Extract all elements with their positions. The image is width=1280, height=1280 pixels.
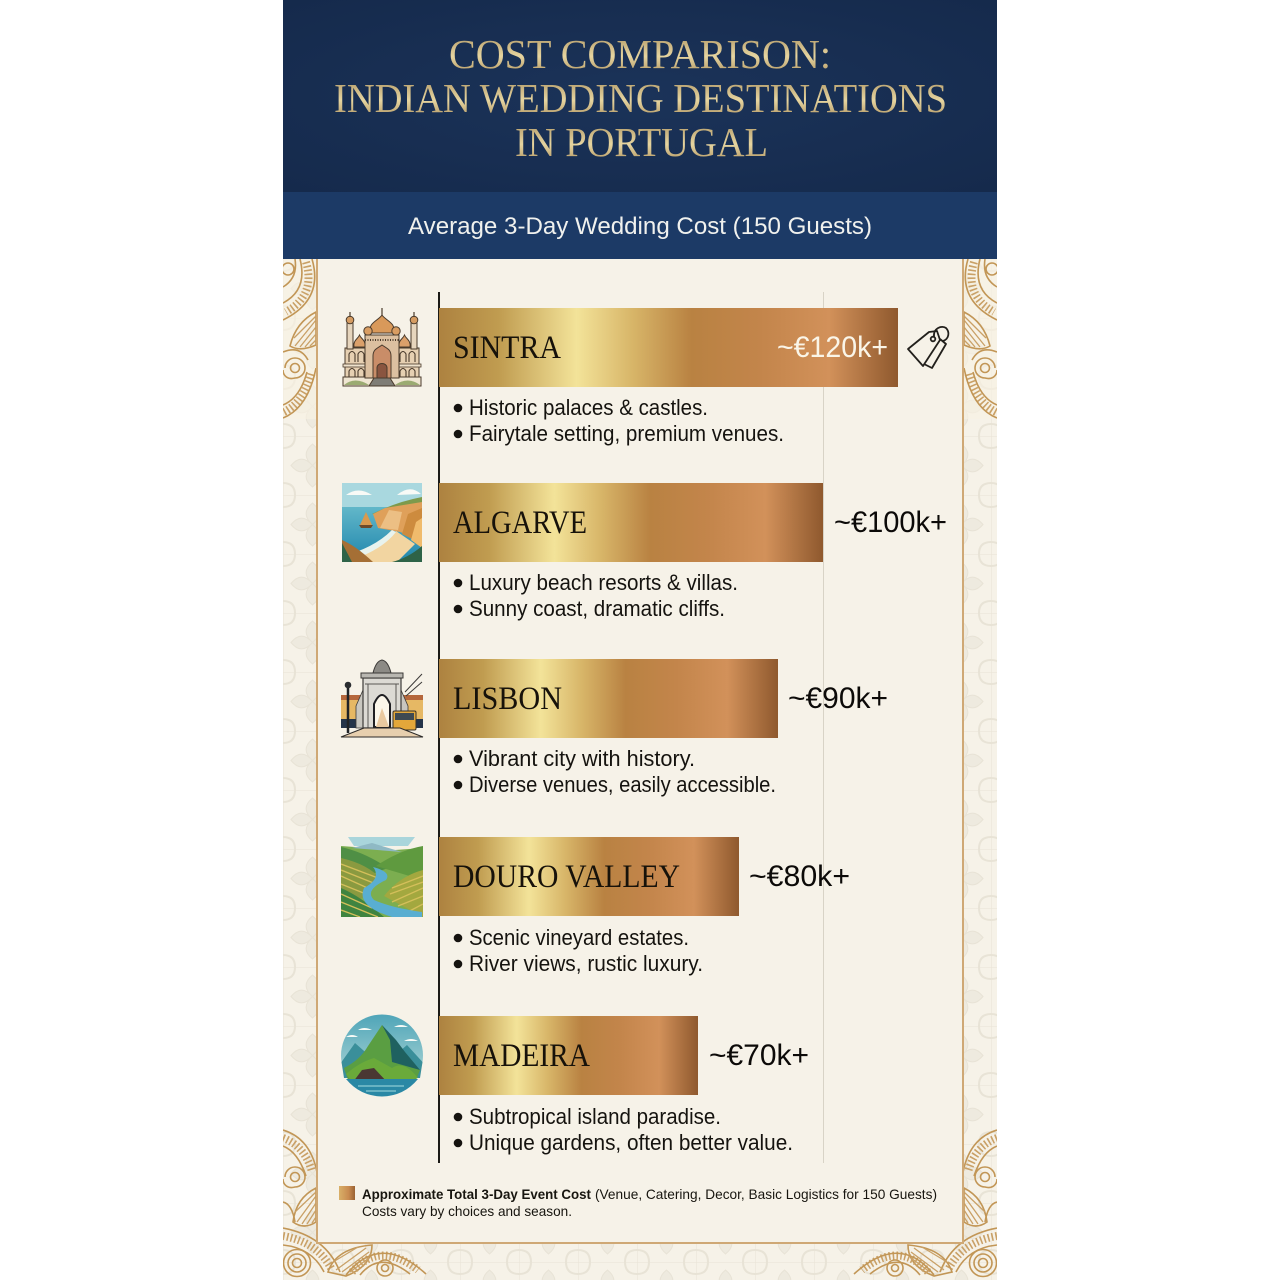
bar: Madeira bbox=[439, 1016, 698, 1095]
details: Douro Valley: Scenic vineyard estates. bbox=[469, 925, 689, 950]
bar: Algarve bbox=[439, 483, 823, 562]
details: Sintra: Historic palaces & castles. bbox=[469, 395, 708, 420]
row: Algarve bbox=[439, 483, 947, 621]
details: Madeira bbox=[454, 1104, 793, 1155]
reference line bbox=[823, 292, 824, 1163]
details: Lisbon: Vibrant city with history. bbox=[469, 746, 695, 771]
bar: Douro Valley bbox=[439, 837, 739, 916]
row: Sintra bbox=[439, 308, 898, 446]
bar: Lisbon bbox=[439, 659, 778, 738]
details: Algarve bbox=[454, 570, 738, 621]
title: IN PORTUGAL bbox=[515, 119, 768, 165]
details: Douro Valley bbox=[454, 925, 703, 976]
details: Madeira: Subtropical island paradise. bbox=[469, 1104, 721, 1129]
legend text: Costs vary by choices and season. bbox=[362, 1203, 572, 1219]
label: Madeira: MADEIRA bbox=[453, 1038, 590, 1074]
price: Madeira: ~€70k+ bbox=[709, 1039, 809, 1072]
axis line bbox=[438, 292, 440, 1163]
details: Douro Valley: River views, rustic luxury. bbox=[469, 951, 703, 976]
label: Lisbon: LISBON bbox=[453, 681, 562, 717]
row: Lisbon bbox=[439, 659, 888, 797]
title: INDIAN WEDDING DESTINATIONS bbox=[334, 75, 947, 121]
label: Algarve: ALGARVE bbox=[453, 505, 587, 541]
icon: Douro valley bbox=[341, 837, 423, 917]
row: Madeira bbox=[439, 1016, 809, 1155]
subtitle band: Average 3-Day Wedding Cost (150 Guests) bbox=[408, 213, 872, 240]
icon: price tags bbox=[908, 327, 948, 368]
legend text bbox=[362, 1186, 937, 1219]
subtitle band bbox=[283, 192, 997, 259]
details: Sintra bbox=[454, 395, 784, 446]
icon: Lisbon arch bbox=[341, 660, 423, 737]
details: Madeira: Unique gardens, often better value. bbox=[469, 1130, 793, 1155]
header band bbox=[283, 0, 997, 192]
legend swatch bbox=[339, 1186, 355, 1200]
price: Lisbon: ~€90k+ bbox=[788, 682, 888, 715]
legend bbox=[339, 1186, 937, 1219]
title bbox=[334, 31, 947, 165]
details: Sintra: Fairytale setting, premium venues. bbox=[469, 421, 784, 446]
icon: Algarve coast bbox=[342, 483, 422, 562]
price: Sintra: ~€120k+ bbox=[777, 331, 888, 364]
label: Douro Valley: DOURO VALLEY bbox=[453, 859, 680, 895]
title: COST COMPARISON: bbox=[449, 31, 831, 77]
bar: Sintra bbox=[439, 308, 898, 387]
page background bbox=[283, 259, 997, 1280]
details: Lisbon: Diverse venues, easily accessible. bbox=[469, 772, 776, 797]
content panel bbox=[317, 259, 963, 1243]
legend text: (Venue, Catering, Decor, Basic Logistics for 150 Guests) bbox=[595, 1186, 937, 1202]
label: Sintra: SINTRA bbox=[453, 330, 561, 366]
legend text: Approximate Total 3-Day Event Cost bbox=[362, 1186, 591, 1202]
row: Douro Valley bbox=[439, 837, 850, 976]
price: Douro Valley: ~€80k+ bbox=[749, 860, 850, 893]
icon: Madeira island bbox=[341, 1014, 423, 1096]
price: Algarve: ~€100k+ bbox=[834, 506, 947, 539]
details: Algarve: Sunny coast, dramatic cliffs. bbox=[469, 596, 725, 621]
corner ornaments bbox=[283, 259, 997, 1278]
details: Algarve: Luxury beach resorts & villas. bbox=[469, 570, 738, 595]
details: Lisbon bbox=[454, 746, 776, 797]
icon: Sintra palace bbox=[343, 308, 421, 386]
